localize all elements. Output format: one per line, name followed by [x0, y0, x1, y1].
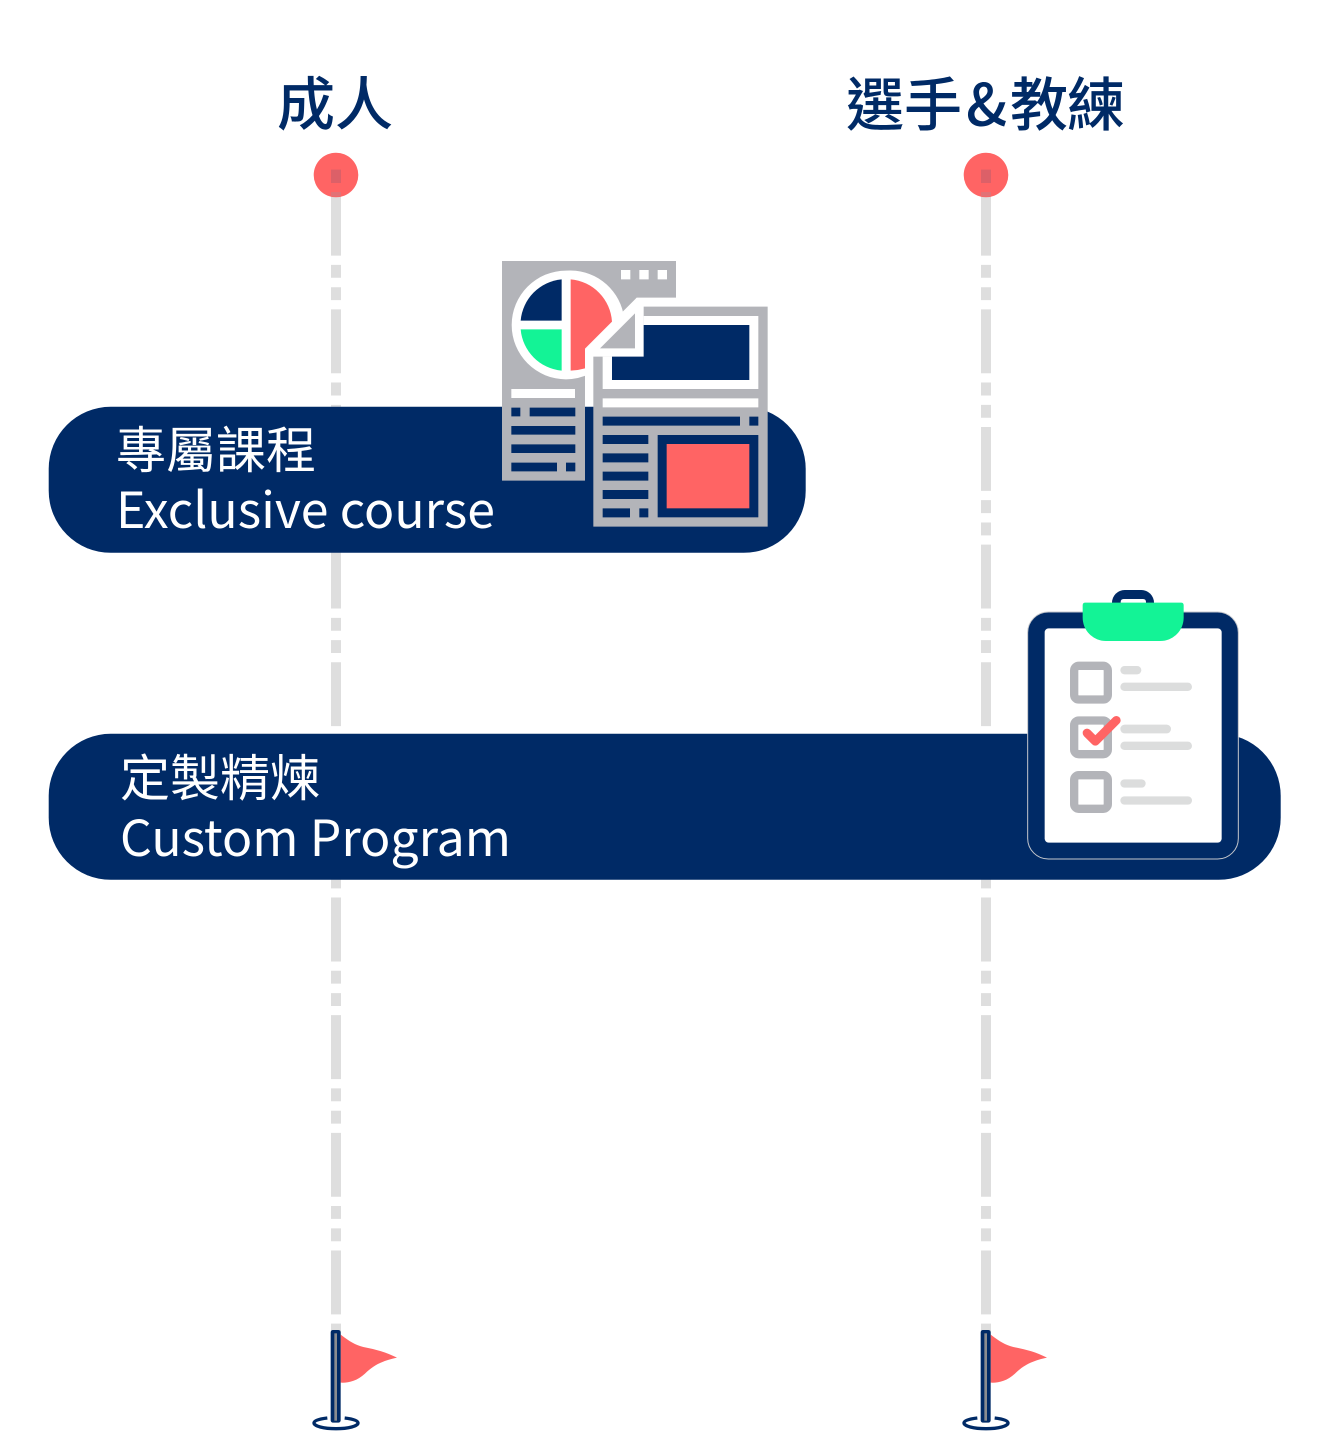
clip ring — [1112, 590, 1154, 605]
header window frame — [603, 316, 758, 389]
timeline line: adults — [331, 170, 341, 1335]
right sheet — [593, 307, 768, 527]
panel: custom program — [49, 734, 1281, 880]
icon: finish flag, athletes and coaches — [964, 1330, 1047, 1429]
label: english: Exclusive course — [116, 472, 495, 543]
pennant — [991, 1335, 1047, 1383]
start dot: adults — [314, 153, 358, 197]
base ring — [314, 1418, 358, 1429]
label: english: Custom Program — [120, 800, 511, 871]
icon: finish flag, adults — [314, 1330, 397, 1429]
header window — [612, 325, 749, 380]
pill background — [49, 734, 1281, 880]
right sheet rows — [603, 417, 758, 517]
checkbox 2 — [1074, 720, 1108, 754]
fold triangle — [600, 313, 635, 348]
paper — [1045, 628, 1222, 843]
checkbox 1 — [1074, 666, 1108, 699]
window dots — [621, 270, 667, 279]
icon: course documents — [502, 261, 768, 527]
pie: green slice — [521, 329, 562, 371]
pole core — [984, 1333, 987, 1421]
pill background — [49, 407, 806, 553]
pennant — [341, 1335, 397, 1383]
label: chinese: 專屬課程 — [116, 411, 316, 483]
left sheet — [502, 261, 676, 481]
image frame — [658, 435, 758, 517]
pie disc — [512, 271, 623, 379]
pie: navy slice — [521, 279, 562, 321]
pole — [331, 1330, 341, 1423]
check mark — [1087, 720, 1116, 741]
left sheet rows — [511, 408, 575, 471]
panel: exclusive course — [49, 407, 806, 553]
pole core — [334, 1333, 337, 1421]
image fill — [667, 444, 749, 508]
clip — [1083, 603, 1184, 641]
list lines — [1120, 666, 1192, 805]
pole — [981, 1330, 991, 1423]
checkbox 3 — [1074, 775, 1108, 809]
clip ring hole — [1121, 599, 1146, 605]
left sheet text slots — [511, 389, 575, 398]
heading: adults: 成人 — [277, 58, 393, 142]
heading: athletes and coaches: 選手&教練 — [846, 58, 1125, 142]
start dot: athletes and coaches — [964, 153, 1008, 197]
icon: clipboard checklist — [1028, 590, 1238, 859]
label: chinese: 定製精煉 — [120, 739, 320, 811]
right sheet slot — [603, 398, 758, 407]
pie: coral slice — [571, 279, 612, 371]
timeline line: athletes and coaches — [981, 170, 991, 1335]
base ring — [964, 1418, 1008, 1429]
board — [1028, 612, 1238, 859]
